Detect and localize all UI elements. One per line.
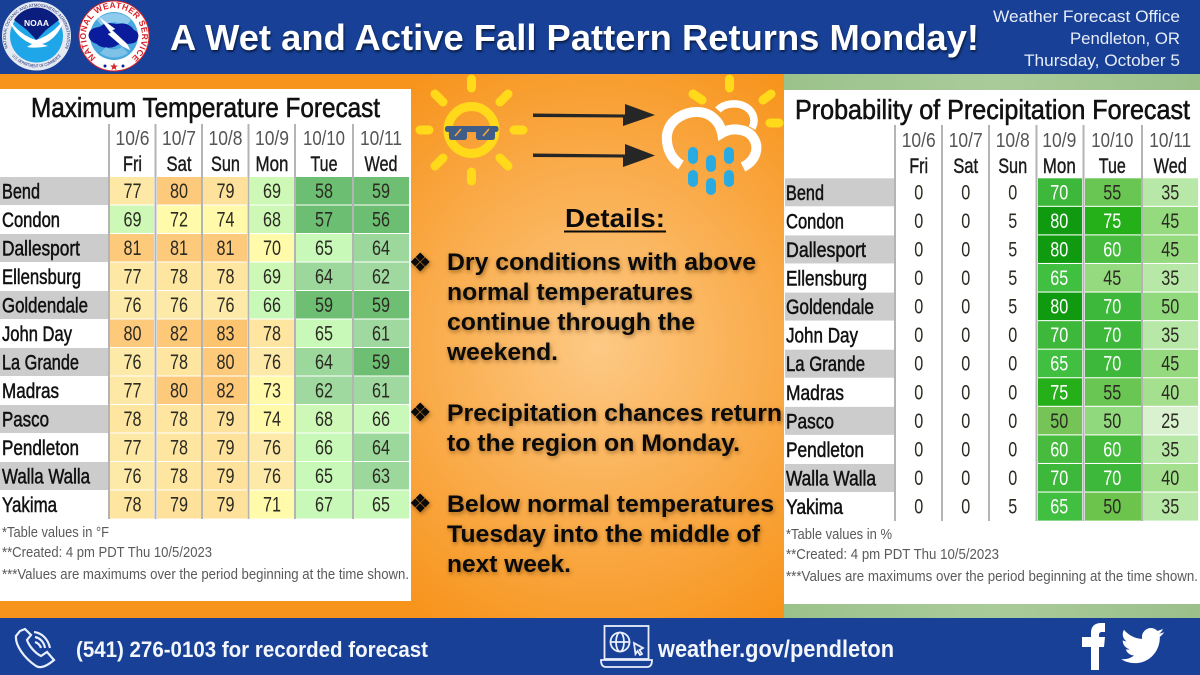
row: Condon: 75 (1103, 210, 1121, 233)
footnotes: precipitation table: *Table values in % (786, 526, 892, 543)
row: John Day: 82 (170, 322, 188, 346)
row: Pendleton: 66 (315, 436, 333, 460)
row: Bend: 35 (1161, 181, 1179, 204)
row: Bend: 79 (216, 180, 234, 203)
row: Dallesport: 0 (914, 238, 923, 261)
bullet: precipitation chances: ❖ (409, 398, 431, 427)
row: Pendleton (2, 434, 409, 461)
rain drops (688, 147, 734, 195)
row: Ellensburg: 78 (170, 266, 188, 288)
icon: NOAA logo: NOAA (24, 18, 49, 28)
row: Madras: 61 (372, 380, 390, 402)
row: Yakima: 78 (124, 494, 142, 516)
bullet: precipitation chances: Precipitation chances return (447, 400, 782, 427)
row: Yakima: Yakima (786, 496, 843, 519)
row: Goldendale: 0 (914, 296, 923, 319)
row: Goldendale: 80 (1050, 296, 1068, 319)
row: Pendleton: 76 (263, 436, 281, 460)
heading: maximum temperature: Maximum Temperature Forecast (31, 92, 380, 123)
column headers: Mon (1043, 155, 1076, 178)
row: Bend: 59 (372, 180, 390, 203)
row: Ellensburg: 5 (1008, 267, 1017, 290)
row: Madras (786, 378, 1198, 406)
row: Pendleton: 64 (372, 436, 390, 460)
row: Bend: 70 (1050, 181, 1068, 204)
column headers: Wed (1154, 155, 1187, 178)
row: Madras: 77 (124, 380, 142, 402)
row: Madras: 75 (1050, 381, 1068, 404)
icon: laptop with globe and cursor (601, 626, 652, 667)
row: La Grande: 45 (1161, 353, 1179, 376)
column headers: Sat (166, 153, 192, 176)
row: Yakima (786, 493, 1198, 521)
row: Pasco: 79 (216, 408, 234, 431)
row: Walla Walla (0, 462, 409, 490)
row: Madras: 80 (170, 380, 188, 402)
row: Ellensburg: 78 (216, 266, 234, 288)
phone number: (541) 276-0103 for recorded forecast (76, 637, 429, 662)
row: Goldendale: 59 (315, 294, 333, 317)
panel: maximum temperature forecast (0, 89, 411, 601)
row: La Grande: La Grande (2, 352, 79, 374)
row: La Grande: 78 (170, 351, 188, 374)
row: Goldendale: Goldendale (2, 294, 88, 318)
row: Walla Walla: 70 (1103, 467, 1121, 490)
row: John Day: 0 (961, 324, 970, 347)
footer banner (0, 618, 1200, 675)
row: Walla Walla: Walla Walla (2, 466, 90, 488)
column headers: Sun (211, 153, 240, 176)
icon: telephone (16, 629, 54, 667)
row: Yakima: 50 (1103, 496, 1121, 519)
row: Bend: 80 (170, 180, 188, 203)
row: Pasco: Pasco (2, 408, 49, 432)
row: Bend (785, 178, 1198, 206)
column headers: 10/9 (255, 128, 289, 150)
bullet: below normal temperatures (409, 489, 774, 578)
row: Goldendale: 0 (961, 296, 970, 319)
row: La Grande (0, 348, 409, 376)
column headers: Sun (998, 155, 1027, 178)
row: Ellensburg: 35 (1161, 267, 1179, 290)
row: Goldendale: 5 (1008, 296, 1017, 319)
row: Pendleton: 0 (1008, 438, 1017, 461)
row: Pasco: 25 (1161, 410, 1179, 433)
heading: details: Details: (565, 203, 665, 233)
row: Madras: 82 (216, 380, 234, 402)
bullet: dry conditions: Dry conditions with above (447, 249, 756, 276)
bullet: dry conditions: weekend. (446, 339, 558, 366)
row: Condon: 56 (372, 208, 390, 232)
row: Yakima: 0 (961, 496, 970, 519)
arrow: lower (533, 144, 655, 167)
row: Walla Walla: 70 (1050, 467, 1068, 490)
bullet: below normal temperatures: Below normal temperatures (447, 491, 774, 518)
bullet: below normal temperatures: next week. (447, 551, 571, 578)
row: Yakima: 35 (1161, 496, 1179, 519)
row: Condon: 57 (315, 208, 333, 232)
row: Ellensburg: Ellensburg (2, 266, 81, 289)
row: Condon (2, 206, 409, 233)
office and date block (993, 7, 1180, 70)
row: John Day: 0 (1008, 324, 1017, 347)
icon: twitter (1121, 628, 1164, 663)
row: Pasco: Pasco (786, 410, 834, 433)
row: Bend: Bend (2, 180, 40, 204)
row: Condon: 74 (216, 208, 235, 232)
row: John Day: 65 (315, 322, 333, 346)
row: Condon: 0 (914, 210, 923, 233)
column headers: 10/10 (1091, 130, 1133, 152)
header banner (0, 0, 1200, 74)
temperature table (0, 177, 409, 518)
bullet: precipitation chances: to the region on Monday. (447, 430, 740, 457)
row: Goldendale: 76 (170, 294, 188, 317)
footnotes: temperature table (2, 524, 409, 583)
row: La Grande: 70 (1103, 353, 1121, 376)
column headers: Tue (1099, 155, 1126, 178)
column headers: 10/8 (996, 130, 1030, 152)
row: Goldendale: 66 (263, 294, 281, 317)
column headers: Tue (310, 153, 338, 176)
row: Bend: 0 (914, 181, 923, 204)
row: La Grande: La Grande (786, 353, 865, 376)
row: La Grande: 76 (263, 351, 281, 374)
row: Dallesport: 60 (1103, 238, 1121, 261)
row: Yakima: 5 (1008, 496, 1017, 519)
row: Pasco: 50 (1103, 410, 1121, 433)
row: Bend (0, 177, 409, 205)
sunglasses (445, 126, 498, 140)
row: Yakima: 79 (216, 494, 234, 516)
row: Dallesport: 5 (1008, 238, 1017, 261)
row: Walla Walla: 78 (170, 465, 188, 488)
column headers: 10/6 (116, 128, 150, 150)
icon: facebook (1082, 623, 1105, 670)
row: Ellensburg: Ellensburg (786, 268, 867, 291)
row: Goldendale: 76 (124, 294, 142, 317)
row: La Grande: 0 (1008, 353, 1017, 376)
footnotes: temperature table: **Created: 4 pm PDT Thu 10/5/2023 (2, 544, 212, 561)
column headers: 10/10 (303, 128, 345, 150)
row: John Day: 83 (216, 322, 234, 346)
row: Yakima: 71 (263, 494, 281, 516)
row: John Day (786, 321, 1198, 349)
row: La Grande: 64 (315, 351, 333, 374)
icon: NOAA logo (2, 2, 71, 70)
row: Goldendale: 50 (1161, 296, 1179, 319)
row: John Day: 78 (263, 322, 281, 346)
column headers: Fri (909, 155, 928, 178)
footnotes: precipitation table: **Created: 4 pm PDT Thu 10/5/2023 (786, 546, 999, 563)
row: John Day: John Day (2, 323, 72, 346)
row: Ellensburg: 64 (315, 266, 333, 288)
row: Madras: 0 (914, 381, 923, 404)
row: Pendleton (786, 435, 1198, 463)
row: Dallesport: 70 (263, 237, 281, 260)
row: Pendleton: 79 (216, 436, 234, 460)
row: La Grande: 0 (961, 353, 970, 376)
row: Walla Walla: 63 (372, 465, 390, 488)
title: A Wet and Active Fall Pattern Returns Monday! (170, 17, 979, 58)
row: Pasco: 0 (1008, 410, 1017, 433)
column headers (116, 128, 402, 176)
row: La Grande: 76 (124, 351, 142, 374)
row: Walla Walla: 79 (216, 465, 234, 488)
precipitation table (785, 178, 1198, 521)
column headers: Wed (364, 153, 398, 176)
row: Dallesport: 45 (1161, 238, 1179, 261)
text block: details bullets (409, 248, 782, 578)
row: Yakima: 67 (315, 494, 333, 516)
bullet: below normal temperatures: Tuesday into the middle of (447, 521, 761, 548)
row: Pasco: 0 (914, 410, 923, 433)
row: Madras: 62 (315, 380, 333, 402)
row: Pendleton: Pendleton (2, 437, 79, 460)
footnotes: temperature table: ***Values are maximums over the period beginning at the time shown. (2, 566, 409, 583)
row: Ellensburg: 77 (124, 266, 142, 288)
row: La Grande: 59 (372, 351, 390, 374)
row: Walla Walla: 0 (914, 467, 923, 490)
row: Walla Walla: 76 (263, 465, 281, 488)
footnotes: precipitation table (786, 526, 1198, 585)
row: Ellensburg (786, 264, 1198, 292)
row: Pendleton: 35 (1161, 438, 1179, 461)
row: Pendleton: 60 (1050, 438, 1068, 461)
row: Dallesport: 64 (372, 237, 390, 260)
row: Walla Walla: 40 (1161, 467, 1179, 490)
row: Dallesport (0, 234, 409, 262)
row: Condon: 69 (124, 208, 142, 232)
column headers: 10/11 (360, 128, 402, 150)
row: Pendleton: 77 (124, 436, 142, 460)
row: John Day: 61 (372, 322, 390, 346)
row: Madras: 73 (263, 380, 281, 402)
row: Walla Walla: 0 (1008, 467, 1017, 490)
row: Bend: Bend (786, 182, 824, 205)
bullet: dry conditions: continue through the (447, 309, 695, 336)
column headers: 10/7 (949, 130, 983, 152)
row: Condon (786, 207, 1198, 234)
row: Ellensburg: 45 (1103, 267, 1121, 290)
row: Dallesport: 0 (961, 238, 970, 261)
column headers: 10/6 (902, 130, 936, 152)
row: La Grande: 0 (914, 353, 923, 376)
row: Pasco: 78 (170, 408, 188, 431)
arrow: upper (533, 104, 655, 126)
row: Goldendale: 59 (372, 294, 390, 317)
row: Pasco: 50 (1050, 410, 1068, 433)
row: Dallesport: 81 (124, 237, 142, 260)
office and date block: Pendleton, OR (1070, 29, 1180, 48)
row: Madras: 40 (1161, 381, 1179, 404)
bullet: dry conditions: ❖ (409, 248, 431, 277)
row: Pasco: 74 (263, 408, 281, 431)
column headers: Mon (256, 153, 288, 176)
office and date block: Thursday, October 5 (1024, 51, 1180, 70)
row: Walla Walla: 76 (124, 465, 142, 488)
office and date block: Weather Forecast Office (993, 7, 1180, 26)
column headers: Fri (123, 153, 142, 176)
row: Condon: 80 (1050, 210, 1068, 233)
row: Ellensburg: 69 (263, 266, 281, 288)
row: Ellensburg: 0 (914, 267, 923, 290)
row: Condon: 5 (1008, 210, 1017, 233)
row: John Day: 80 (124, 322, 142, 346)
row: Goldendale: Goldendale (786, 296, 874, 319)
row: Dallesport: Dallesport (2, 238, 80, 260)
icon: NOAA logo: U.S. DEPARTMENT OF COMMERCE (12, 54, 62, 68)
column headers: 10/11 (1149, 130, 1191, 152)
row: Pendleton: 60 (1103, 438, 1121, 461)
bullet: dry conditions (409, 248, 756, 366)
row: Yakima: 0 (914, 496, 923, 519)
row: Goldendale (785, 293, 1198, 321)
row: Condon: 45 (1161, 210, 1179, 233)
row: Yakima: Yakima (2, 494, 57, 517)
row: Pendleton: 0 (914, 438, 923, 461)
row: Madras: 0 (1008, 381, 1017, 404)
row: Pasco: 78 (124, 408, 142, 431)
column headers: 10/7 (162, 128, 196, 150)
row: Ellensburg: 65 (1050, 267, 1068, 290)
green background panel (784, 74, 1200, 618)
row: Bend: 77 (124, 180, 142, 203)
row: Ellensburg (2, 262, 409, 290)
row: Pendleton: 0 (961, 438, 970, 461)
row: Condon: 0 (961, 210, 970, 233)
row: Pendleton: Pendleton (786, 439, 864, 462)
row: Pasco: 68 (315, 408, 333, 431)
row: Condon: Condon (786, 210, 844, 233)
row: Ellensburg: 62 (372, 266, 390, 288)
row: Goldendale: 70 (1103, 296, 1121, 319)
row: Pendleton: 78 (170, 436, 188, 460)
row: Pasco: 0 (961, 410, 970, 433)
bullet: dry conditions: normal temperatures (447, 279, 693, 306)
column headers: Sat (953, 155, 978, 178)
row: John Day: 70 (1103, 324, 1121, 347)
row: Walla Walla (785, 464, 1198, 492)
row: Bend: 69 (263, 180, 281, 203)
row: Bend: 0 (1008, 181, 1017, 204)
row: Bend: 55 (1103, 181, 1121, 204)
row: Goldendale (0, 291, 409, 319)
column headers: 10/8 (208, 128, 242, 150)
row: Pasco (0, 405, 409, 433)
row: Condon: 72 (170, 208, 188, 232)
row: Dallesport: Dallesport (786, 239, 866, 262)
row: Dallesport: 81 (216, 237, 234, 260)
row: Walla Walla: 0 (961, 467, 970, 490)
row: Dallesport: 81 (170, 237, 188, 260)
row: Condon: 68 (263, 208, 281, 232)
footnotes: temperature table: *Table values in °F (2, 524, 109, 541)
row: Walla Walla: 65 (315, 465, 333, 488)
row: John Day: 70 (1050, 324, 1068, 347)
row: Dallesport: 65 (315, 237, 333, 260)
panel: probability of precipitation forecast (784, 90, 1200, 604)
bullet: precipitation chances (409, 398, 782, 457)
orange background panel (0, 74, 784, 618)
icon: NOAA logo: NATIONAL OCEANIC AND ATMOSPHERIC ADMINISTRATION (3, 4, 70, 49)
row: Ellensburg: 0 (961, 267, 970, 290)
row: Yakima (2, 490, 409, 518)
column headers: 10/9 (1042, 130, 1076, 152)
column headers (902, 130, 1191, 178)
row: Condon: Condon (2, 209, 60, 232)
row: John Day: 35 (1161, 324, 1179, 347)
row: John Day (2, 320, 409, 347)
row: La Grande: 80 (216, 351, 234, 374)
row: Goldendale: 76 (216, 294, 234, 317)
bullet: below normal temperatures: ❖ (409, 489, 431, 518)
row: Yakima: 79 (170, 494, 188, 516)
icon: rain cloud with sun (667, 79, 779, 195)
website: weather.gov/pendleton (657, 636, 894, 663)
row: Madras: Madras (2, 380, 59, 403)
row: Yakima: 65 (372, 494, 390, 516)
row: Dallesport: 80 (1050, 238, 1068, 261)
row: Yakima: 65 (1050, 496, 1068, 519)
row: Dallesport (785, 235, 1198, 263)
row: Bend: 0 (961, 181, 970, 204)
row: Pasco (785, 407, 1198, 435)
icon: National Weather Service logo: NATIONAL WEATHER SERVICE (80, 2, 148, 62)
row: Pasco: 66 (372, 408, 390, 431)
row: La Grande: 65 (1050, 353, 1068, 376)
row: Bend: 58 (315, 180, 333, 203)
row: Walla Walla: Walla Walla (786, 468, 876, 490)
row: John Day: John Day (786, 325, 858, 348)
row: Madras (2, 376, 409, 404)
row: Madras: 55 (1103, 381, 1121, 404)
row: Madras: 0 (961, 381, 970, 404)
row: Madras: Madras (786, 382, 844, 405)
row: John Day: 0 (914, 324, 923, 347)
row: La Grande (785, 350, 1198, 378)
icon: sun with sunglasses (420, 79, 523, 181)
